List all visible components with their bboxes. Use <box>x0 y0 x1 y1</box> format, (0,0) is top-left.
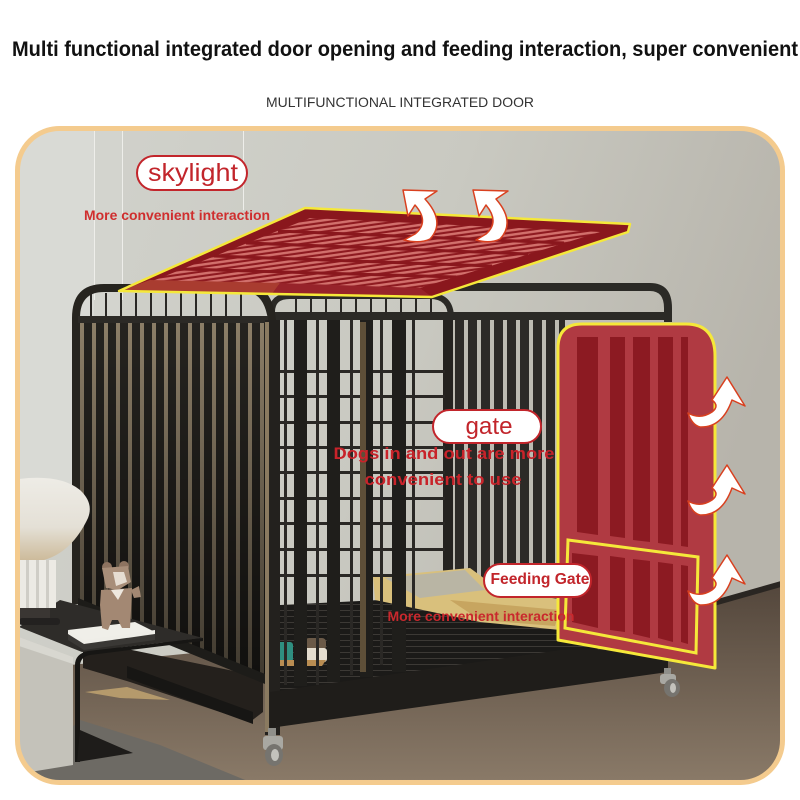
bear figurine <box>100 561 141 630</box>
caption: feeding gate: More convenient interaction <box>388 608 574 624</box>
rug <box>35 720 245 780</box>
skylight panel <box>119 208 630 297</box>
label: skylight: skylight <box>148 159 238 187</box>
arrow: door middle <box>688 465 745 515</box>
front arch <box>272 295 454 313</box>
caption: gate: convenient to use <box>364 470 522 489</box>
cage bottom rail <box>270 648 668 728</box>
arrow: door top <box>688 377 745 427</box>
cage left panel <box>72 284 280 735</box>
caster: front <box>263 728 283 766</box>
arrow: skylight right <box>473 190 508 242</box>
shadow under left panel <box>83 648 263 720</box>
caster: right <box>660 668 680 697</box>
wall background <box>20 131 780 665</box>
sofa block <box>19 637 73 772</box>
arrow: skylight left <box>403 190 437 242</box>
feeding bowls <box>277 638 327 666</box>
label: skylight <box>137 156 247 190</box>
label: gate: gate <box>466 413 512 440</box>
caption: skylight: More convenient interaction <box>84 207 270 223</box>
caption: gate: Dogs in and out are more <box>334 444 554 463</box>
side table <box>19 600 203 762</box>
label: feeding gate <box>484 564 591 597</box>
subtitle: MULTIFUNCTIONAL INTEGRATED DOOR <box>266 94 534 110</box>
books <box>68 622 155 650</box>
cage top pickets <box>90 293 432 316</box>
cage back panel <box>275 283 672 605</box>
rail under left panel <box>127 666 253 724</box>
label: feeding gate: Feeding Gate <box>490 571 590 588</box>
arrow: door bottom <box>688 555 745 605</box>
cage floor grid <box>280 598 598 690</box>
door panel <box>558 324 715 668</box>
light streak on floor <box>85 687 170 700</box>
bed <box>373 568 565 630</box>
panel: room scene with cage <box>18 128 782 782</box>
frame border <box>18 128 782 782</box>
label: gate <box>433 410 541 443</box>
wood floor <box>19 585 781 782</box>
cage front grid <box>280 320 445 686</box>
caption: gate <box>334 444 554 489</box>
feeding gate outline <box>565 540 698 653</box>
lamp <box>19 478 90 625</box>
